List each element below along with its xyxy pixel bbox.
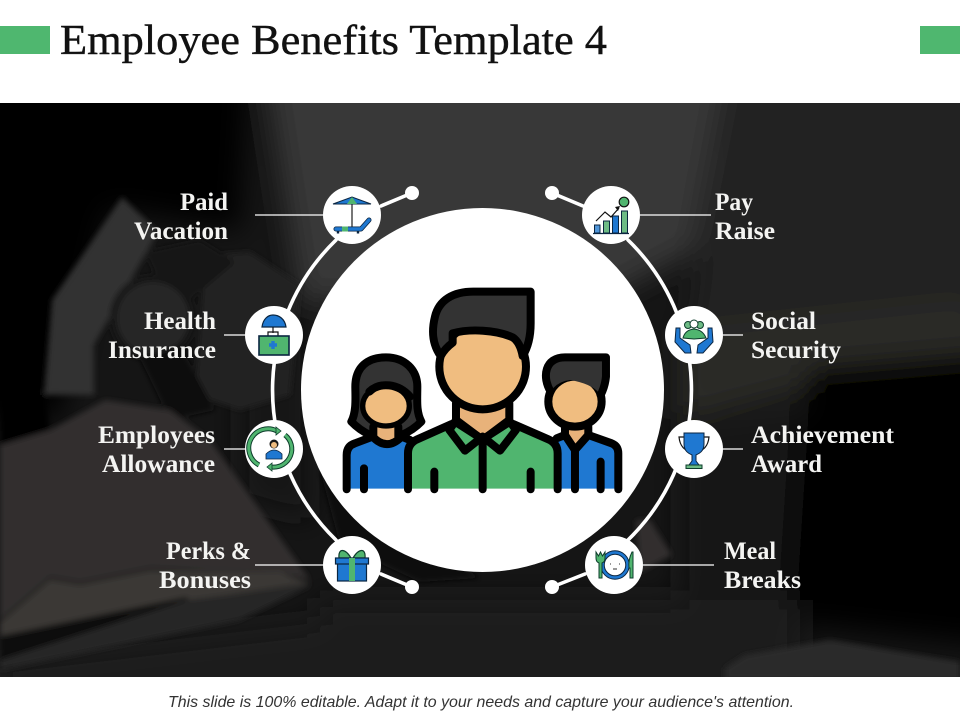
label: Achievement Award: Achievement: [751, 422, 895, 449]
woman: [347, 357, 421, 489]
right man: [546, 357, 618, 489]
icon: medical case under umbrella: [245, 306, 303, 364]
label: Perks & Bonuses: Perks &: [166, 538, 251, 565]
label: Pay Raise: Raise: [715, 218, 775, 245]
icon: team of three people: [347, 292, 618, 489]
centre man: [408, 292, 558, 489]
ring end dots: [405, 186, 559, 594]
label: Health Insurance: Insurance: [108, 337, 216, 364]
icon: hands holding people: [665, 306, 723, 364]
left header accent bar: [0, 26, 50, 54]
icon: rising bar chart with coin: [582, 186, 640, 244]
hand: [195, 252, 300, 410]
label: Employees Allowance: Employees: [98, 422, 215, 449]
label: Health Insurance: Health: [144, 308, 216, 335]
strap and watch: [156, 250, 230, 296]
label: Pay Raise: Pay: [715, 189, 753, 216]
label: Meal Breaks: Meal: [724, 538, 776, 565]
label: Employees Allowance: Allowance: [102, 451, 215, 478]
label: Social Security: [723, 308, 841, 364]
connector ring: [273, 193, 691, 587]
icon: plate with fork and knife: [585, 536, 643, 594]
label: Achievement Award: Award: [751, 451, 822, 478]
footer note: This slide is 100% editable. Adapt it to your needs and capture your audience's attention.: [168, 694, 794, 711]
cuff: [44, 197, 158, 395]
wrist shadow: [320, 470, 480, 582]
paper: [0, 400, 310, 620]
label: Paid Vacation: [134, 189, 324, 245]
label: Social Security: Social: [751, 308, 816, 335]
label: Meal Breaks: Breaks: [724, 567, 801, 594]
icon: employee in circular arrows: [245, 420, 303, 478]
label: Paid Vacation: Vacation: [134, 218, 228, 245]
white centre circle: [301, 208, 664, 572]
label: Employees Allowance: [98, 422, 246, 478]
icon: beach umbrella and lounger: [323, 186, 381, 244]
icon: gift box: [323, 536, 381, 594]
label: Paid Vacation: Paid: [180, 189, 228, 216]
title: Employee Benefits Template 4: [60, 18, 607, 64]
label: Health Insurance: [108, 308, 246, 364]
label: Social Security: Security: [751, 337, 841, 364]
label: Pay Raise: [640, 189, 775, 245]
icon: trophy: [665, 420, 723, 478]
label: Perks & Bonuses: [159, 538, 324, 594]
label: Perks & Bonuses: Bonuses: [159, 567, 251, 594]
label: Meal Breaks: [643, 538, 801, 594]
right header accent bar: [920, 26, 960, 54]
background photo: handshake, darkened: [0, 103, 960, 677]
dark shape on paper: [0, 392, 50, 445]
label: Achievement Award: [723, 422, 895, 478]
